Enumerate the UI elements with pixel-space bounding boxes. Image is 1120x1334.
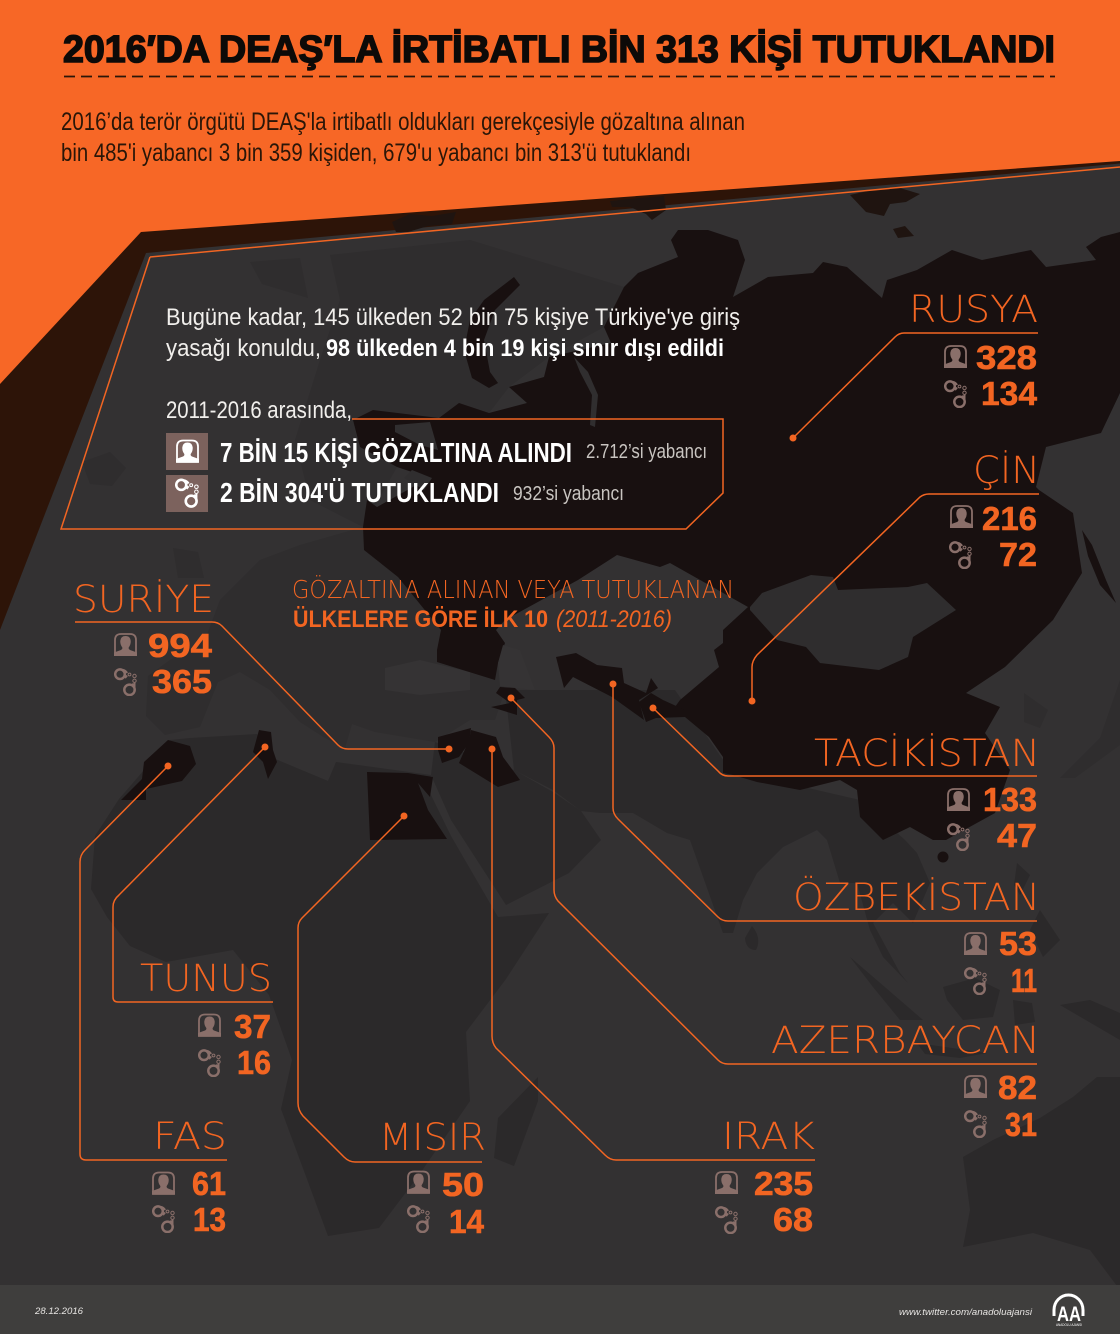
map: Morocco — [121, 740, 196, 800]
icon: handcuffs box — [166, 475, 208, 512]
name: IRAK — [722, 1115, 815, 1158]
callout: entry bans text — [166, 304, 740, 362]
icon: handcuffs — [965, 1111, 986, 1137]
map: north Atlantic islands — [82, 258, 308, 578]
detained count: 82 — [998, 1069, 1037, 1106]
map: Caspian Sea — [498, 645, 535, 690]
callout: entry bans text: Bugüne kadar, 145 ülkeden 52 bin 75 kişiye Türkiye'ye giriş — [166, 304, 740, 331]
arrested count: 11 — [1011, 962, 1037, 999]
name: ÖZBEKİSTAN — [793, 875, 1040, 919]
detained count: 61 — [192, 1165, 226, 1202]
name: FAS — [153, 1115, 227, 1158]
country: Fas — [80, 762, 227, 1238]
arrested count: 14 — [449, 1203, 485, 1240]
country: Tunus — [113, 744, 273, 1081]
map: Madagascar — [494, 1077, 538, 1166]
detained count: 328 — [976, 339, 1037, 376]
map: Scandinavia — [295, 240, 624, 527]
callout: arrested row — [166, 475, 624, 512]
map: Tunisia — [253, 730, 277, 779]
map: Syria — [438, 728, 471, 763]
icon: AA logo: ANADOLU AJANSI — [1056, 1322, 1082, 1327]
map: Iraq — [459, 730, 520, 787]
top 10 heading: ÜLKELERE GÖRE İLK 10 — [293, 606, 548, 633]
icon: handcuffs — [115, 669, 136, 695]
name: RUSYA — [909, 288, 1038, 331]
icon: person — [964, 933, 987, 955]
name: MISIR — [379, 1116, 486, 1159]
detained foreigners note: 2.712’si yabancı — [586, 441, 707, 463]
map: Egypt — [367, 772, 447, 840]
map: gulf shapes — [395, 357, 598, 490]
map: Sakhalin — [1082, 530, 1116, 603]
icon: person — [715, 1172, 738, 1194]
map: Azerbaijan — [491, 687, 525, 715]
detained count: 216 — [982, 500, 1037, 537]
icon: person — [114, 634, 137, 656]
twitter url: www.twitter.com/anadoluajansi — [899, 1307, 1033, 1318]
country: Irak — [488, 746, 815, 1238]
leader line — [790, 333, 1038, 442]
icon: person — [964, 1076, 987, 1098]
icon: person — [152, 1172, 175, 1194]
country: Azerbaycan — [508, 694, 1040, 1143]
map: arctic islands in band — [392, 188, 920, 238]
map: Korea and Japan — [1024, 680, 1120, 778]
country: Özbekistan — [610, 680, 1040, 999]
detained count: 133 — [983, 781, 1037, 818]
map: White Sea crescent — [464, 277, 520, 388]
detained count: 53 — [999, 925, 1037, 962]
title dashed rule — [64, 76, 1055, 78]
intro text: 2016’da terör örgütü DEAŞ'la irtibatlı oldukları gerekçesiyle gözaltına alınan — [61, 108, 745, 136]
detained count: 235 — [754, 1165, 813, 1202]
icon: person box — [166, 433, 208, 470]
icon: person — [947, 789, 970, 811]
arrested count: 47 — [997, 817, 1037, 854]
name: TUNUS — [140, 957, 272, 1000]
arrested count: 68 — [773, 1201, 813, 1238]
title: 2016′DA DEAŞ′LA İRTİBATLI BİN 313 KİŞİ TUTUKLANDI — [63, 29, 1055, 71]
map: southeast Asia islands — [745, 863, 1120, 1058]
icon: person — [950, 506, 973, 528]
leader line — [80, 762, 227, 1160]
map: Uzbekistan — [556, 653, 658, 720]
icon: person — [944, 346, 967, 368]
country: Rusya — [790, 288, 1038, 442]
intro text — [61, 108, 745, 167]
name: TACİKİSTAN — [814, 732, 1040, 775]
arrested foreigners note: 932’si yabancı — [513, 483, 624, 505]
icon: person — [198, 1014, 221, 1036]
map: Tajikistan — [639, 693, 685, 722]
callout: entry bans text: yasağı konuldu, — [166, 335, 321, 362]
map: Black Sea — [385, 660, 470, 695]
arrested count: 31 — [1005, 1106, 1037, 1143]
map: Africa — [91, 734, 549, 1236]
icon: handcuffs — [153, 1206, 174, 1232]
detained count: 994 — [148, 627, 213, 664]
detained count: 50 — [442, 1166, 484, 1203]
callout: entry bans text: 98 ülkeden 4 bin 19 kişi sınır dışı edildi — [326, 335, 724, 362]
top 10 heading: (2011-2016) — [556, 606, 672, 633]
icon: handcuffs — [948, 824, 969, 850]
country: Çin — [748, 449, 1040, 704]
leader line — [610, 680, 1037, 921]
leader line — [298, 812, 482, 1162]
detained headline: 7 BİN 15 KİŞİ GÖZALTINA ALINDI — [220, 437, 572, 468]
country: Mısır — [298, 812, 486, 1240]
country: Suriye — [73, 578, 452, 752]
map: Hainan — [938, 852, 948, 862]
icon: person — [407, 1172, 430, 1194]
leader line — [75, 622, 452, 752]
icon: handcuffs — [965, 968, 986, 994]
callout frame — [61, 167, 1120, 529]
map: Australia — [963, 1077, 1120, 1290]
name: SURİYE — [73, 578, 214, 621]
arrested headline: 2 BİN 304'Ü TUTUKLANDI — [220, 477, 499, 508]
name: ÇİN — [973, 449, 1040, 492]
icon: AA logo — [1054, 1295, 1083, 1327]
arrested count: 72 — [999, 536, 1037, 573]
icon: handcuffs — [408, 1206, 429, 1232]
map: Europe — [146, 527, 505, 748]
arrested count: 134 — [981, 375, 1038, 412]
country: Tacikistan — [650, 704, 1040, 854]
map: Russia and China — [353, 230, 1120, 840]
icon: handcuffs — [945, 381, 966, 407]
leader line — [488, 746, 815, 1160]
arrested count: 13 — [193, 1201, 226, 1238]
icon: handcuffs — [199, 1050, 220, 1076]
leader line — [113, 744, 273, 1002]
top 10 heading — [292, 574, 734, 633]
detained count: 37 — [234, 1008, 271, 1045]
name: AZERBAYCAN — [771, 1019, 1040, 1062]
map: South Asia — [505, 690, 930, 983]
map: Mongolia — [750, 575, 956, 670]
arrested count: 16 — [237, 1044, 271, 1081]
callout: period text: 2011-2016 arasında, — [166, 397, 352, 424]
leader line — [508, 694, 1037, 1064]
icon: handcuffs — [950, 542, 971, 568]
arrested count: 365 — [152, 663, 212, 700]
intro text: bin 485'i yabancı 3 bin 359 kişiden, 679'u yabancı bin 313'ü tutuklandı — [61, 139, 691, 167]
top 10 heading: GÖZALTINA ALINAN VEYA TUTUKLANAN — [292, 574, 734, 604]
icon: AA logo: AA — [1057, 1303, 1081, 1326]
date: 28.12.2016 — [34, 1306, 84, 1317]
world map — [82, 188, 1120, 1290]
map: Arabia — [431, 742, 601, 905]
leader line — [748, 494, 1039, 704]
leader line — [650, 704, 1037, 776]
footer — [0, 1285, 1120, 1334]
icon: handcuffs — [716, 1207, 737, 1233]
callout: detained row — [166, 433, 707, 470]
